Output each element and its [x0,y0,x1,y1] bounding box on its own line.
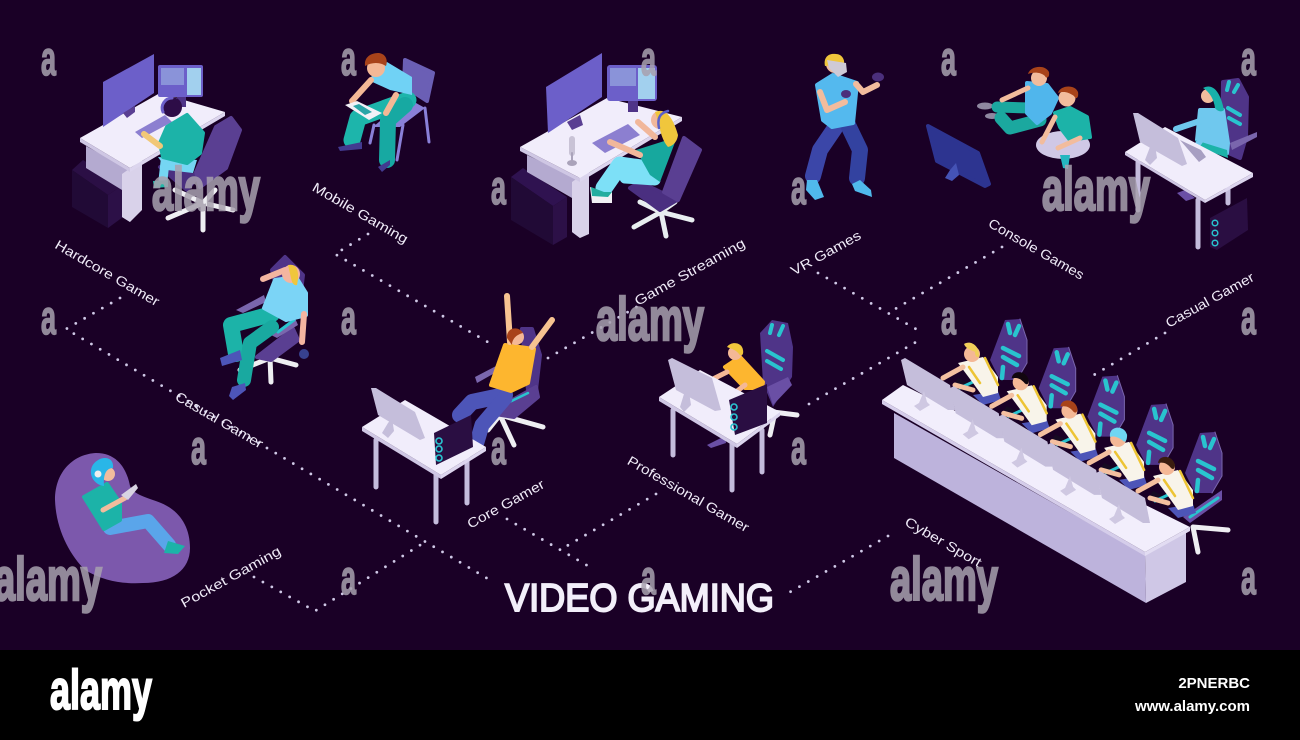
image id: 2PNERBC [1178,675,1250,692]
pc tower [511,168,567,245]
gaming chairs [990,319,1222,523]
player two [1036,86,1090,169]
watermarks: alamy [1042,156,1150,223]
monitors [103,54,203,127]
watermarks: a [1241,33,1256,86]
desk [659,370,780,490]
label: casual gamer left: Casual Gamer [173,389,266,452]
label: mobile gaming: Mobile Gaming [310,180,411,247]
pc tower [1210,198,1248,250]
watermarks: a [791,162,806,215]
chair [236,257,303,382]
players [943,343,1196,518]
scene: console games [928,67,1090,186]
watermarks: alamy [596,286,704,353]
player 3 [1040,400,1098,462]
category labels [52,180,1257,611]
scene: professional gamer [659,320,797,490]
watermarks: a [41,292,56,345]
scene: game streaming [511,53,700,245]
label: game streaming: Game Streaming [632,235,748,309]
chair [475,329,543,445]
pc tower [434,415,473,465]
scene: pocket gaming on beanbag [55,453,190,583]
gaming chair [1222,80,1257,158]
pc tower [729,384,767,435]
player 4 [1089,428,1147,490]
player 2 [992,372,1050,433]
flow connector lines [66,234,1165,611]
chair [760,320,797,435]
keyboard [592,124,640,153]
label: VR games: VR Games [788,227,864,279]
monitor [668,358,721,412]
monitors [901,358,1150,524]
desk [520,98,682,238]
watermarks: a [491,422,506,475]
legs [813,125,860,178]
label: console games: Console Games [986,216,1087,283]
monitors and microphone [546,53,657,166]
watermarks: a [641,552,656,605]
watermarks: a [641,33,656,86]
scene: cyber sport team [882,319,1228,603]
desk [1125,127,1253,247]
watermarks: alamy [890,546,998,613]
label: hardcore gamer: Hardcore Gamer [52,237,163,309]
scene: relaxed casual gamer [220,257,309,400]
desk [80,93,225,222]
pc tower [72,160,123,228]
shoes [806,180,872,200]
watermarks: a [1241,552,1256,605]
player one [977,67,1057,128]
foot [1177,190,1195,201]
monitor and keyboard [1133,113,1206,166]
head with VR headset [825,54,847,77]
streamer [590,111,678,203]
player 5 [1138,457,1196,518]
watermarks: a [341,33,356,86]
title: VIDEO GAMING [505,577,774,620]
watermarks: a [41,33,56,86]
footer logo: alamy [50,658,152,721]
player [1176,86,1228,158]
watermarks: a [491,162,506,215]
scene: mobile gaming [338,53,433,172]
watermarks: alamy [152,156,260,223]
label: pocket gaming: Pocket Gaming [178,543,283,611]
scene: core gamer [362,296,552,522]
keyboard [135,115,172,138]
scene: casual gamer at right desk [1125,80,1257,250]
footer bar [0,650,1300,740]
label: casual gamer right: Casual Gamer [1163,269,1257,331]
watermarks: a [341,552,356,605]
chair base [1193,527,1228,552]
chair [630,138,700,236]
watermarks: a [341,292,356,345]
player 1 [943,343,1001,405]
label: core gamer: Core Gamer [465,476,548,531]
watermarks [0,33,1256,613]
body and arms [817,72,884,127]
watermarks: a [941,33,956,86]
player [460,296,552,442]
monitor [371,388,425,440]
player [711,343,763,398]
label: cyber sport: Cyber Sport [902,514,984,570]
watermarks: a [191,422,206,475]
foot [707,436,726,448]
watermarks: a [1241,292,1256,345]
label: professional gamer: Professional Gamer [625,453,752,535]
watermarks: a [941,292,956,345]
body [220,265,309,400]
chair [370,60,433,160]
chair [160,118,240,230]
player [338,53,412,172]
website: www.alamy.com [1134,698,1250,715]
desk [362,400,486,522]
watermarks: a [791,422,806,475]
team table [882,385,1190,603]
beanbag [55,453,190,583]
scene: VR games [806,54,884,200]
player [84,458,185,554]
tv [928,126,989,186]
scene: hardcore gamer at desk [72,54,240,230]
player [144,97,203,188]
